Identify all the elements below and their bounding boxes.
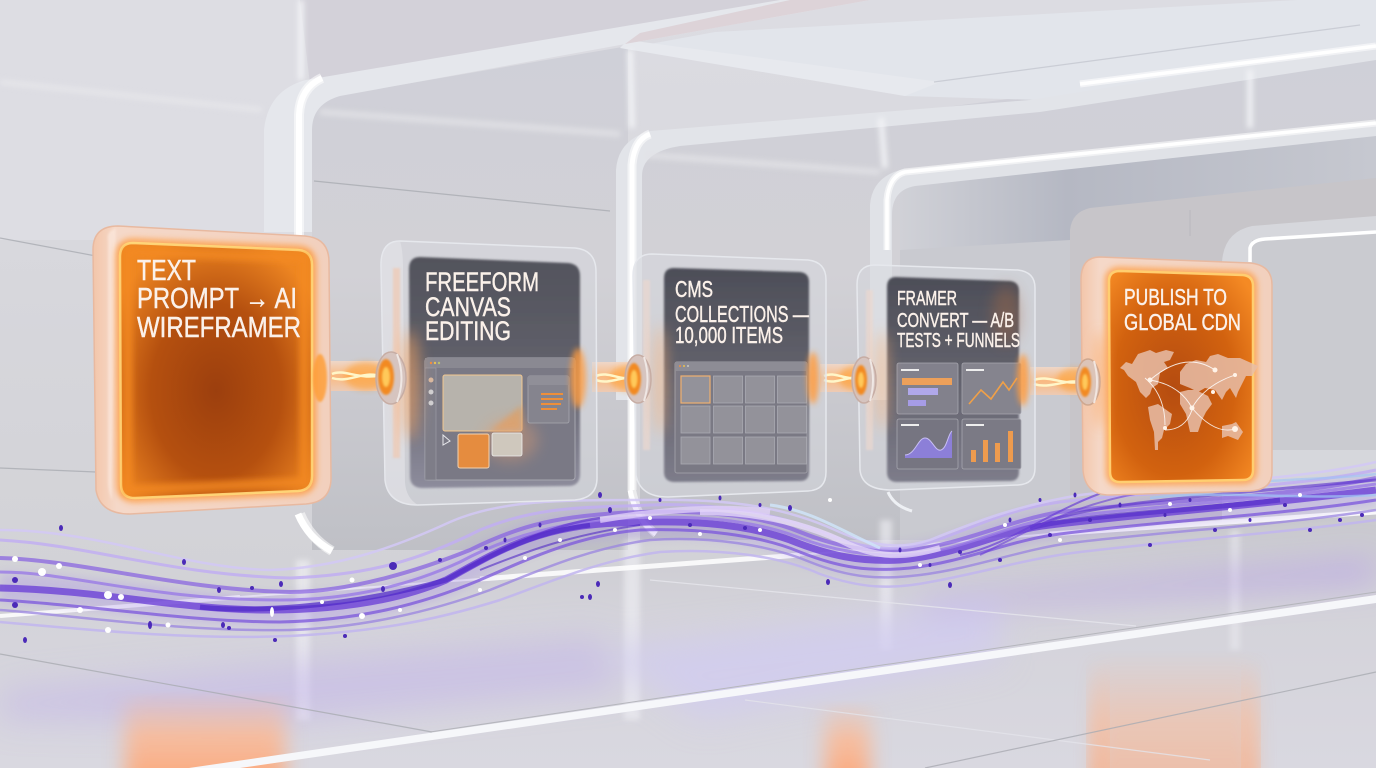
network arcs: [1145, 362, 1235, 430]
floor bright strip: [189, 595, 1376, 768]
side panel: [528, 376, 569, 423]
back room: [1070, 178, 1376, 530]
orange floor glow: [125, 650, 1256, 768]
item grid: [681, 376, 806, 464]
arch 1 pillar: [264, 0, 870, 232]
glass slab: [633, 254, 826, 497]
orange screen: [120, 243, 312, 498]
side glow: [654, 325, 666, 435]
interior of first arch: [312, 46, 628, 550]
dark screen: [887, 277, 1019, 482]
main artboard: [443, 375, 522, 431]
arch 2 pillar: [616, 45, 1376, 400]
ring 1: [376, 352, 406, 404]
area chart panel: [897, 419, 958, 469]
ring 4: [1076, 359, 1100, 405]
tube 3: [820, 364, 871, 392]
floor: [0, 510, 1376, 768]
interior of third arch: [900, 128, 1376, 540]
heading: [425, 267, 539, 346]
heading: FREEFORM: [425, 267, 539, 297]
card 2: freeform canvas editing: [381, 241, 597, 505]
tube 2: [592, 362, 646, 392]
heading: PUBLISH TO: [1124, 284, 1227, 310]
thin strands: [0, 478, 1376, 592]
floor reflections: [296, 520, 1240, 720]
connector tubes between cards: [326, 361, 1093, 395]
connector rings at card inputs: [376, 352, 1100, 405]
orange artboard: [458, 434, 489, 468]
line chart panel: [962, 363, 1021, 414]
cream artboard: [492, 433, 522, 456]
card 5: publish to global CDN: [1081, 257, 1272, 495]
copper tint on screen: [992, 285, 1020, 345]
canvas app window: [425, 358, 575, 480]
heading: CONVERT — A/B: [897, 310, 1014, 332]
card 4: Framer Convert A/B tests and funnels: [857, 265, 1035, 490]
card 1: text prompt to AI wireframer: [93, 226, 331, 514]
side glow: [1095, 330, 1105, 430]
ring 2: [625, 355, 651, 403]
faint vertical wall lights: [0, 0, 1250, 172]
south america: [1148, 404, 1172, 450]
bar chart panel: [962, 419, 1021, 469]
heading: CMS: [675, 276, 713, 302]
particles: [12, 492, 1364, 643]
heading: [675, 276, 809, 348]
card 3: CMS collections: [633, 254, 826, 497]
dark screen: [664, 268, 809, 482]
glass slab: [857, 265, 1035, 490]
heading: [897, 288, 1020, 352]
main thick strand: [0, 490, 1376, 610]
heading: GLOBAL CDN: [1124, 309, 1241, 335]
arch 3 pillar: [870, 123, 1376, 400]
stream glow: [0, 490, 1376, 610]
heading: EDITING: [425, 316, 511, 346]
light strip glow: [299, 46, 1376, 551]
heading: PROMPT → AI: [137, 283, 297, 315]
arch 1 beam underside: [625, 0, 870, 44]
north america: [1120, 350, 1174, 398]
cursor: [443, 435, 450, 445]
glass slab: [381, 241, 597, 505]
ceiling between the arches: [300, 0, 790, 84]
purple data stream: [0, 462, 1376, 643]
australia: [1222, 422, 1243, 440]
heading: 10,000 ITEMS: [675, 322, 783, 348]
glass slab: [93, 226, 331, 514]
tube 1: [326, 361, 388, 391]
bright light strips: [298, 46, 1376, 551]
side glow: [876, 330, 888, 430]
heading: FRAMER: [897, 288, 957, 310]
right end panel: [1222, 216, 1376, 530]
tube 4: [1030, 367, 1093, 395]
glowing floor edge strip: [0, 512, 1376, 616]
heading: TESTS + FUNNELS: [897, 330, 1020, 352]
side glow: [400, 330, 420, 440]
heading: [1124, 284, 1241, 335]
tube bulge: [313, 354, 327, 402]
purple floor glow: [0, 560, 1376, 725]
ceiling panel: [628, 0, 1376, 100]
network nodes: [1148, 368, 1238, 432]
africa: [1180, 390, 1212, 432]
glass slab: [1081, 257, 1272, 495]
left wall upper tone: [0, 0, 300, 240]
heading: [137, 255, 301, 344]
heading: CANVAS: [425, 292, 511, 322]
screen halo: [1109, 271, 1253, 482]
orange screen: [1109, 271, 1253, 482]
collection window: [675, 362, 807, 473]
screen halo: [120, 243, 312, 498]
A/B bars panel: [897, 363, 958, 414]
eurasia: [1180, 354, 1258, 400]
dark screen: [409, 257, 580, 488]
heading: WIREFRAMER: [137, 312, 301, 344]
interior of second arch: [640, 52, 1376, 540]
darker core segments: [200, 525, 590, 609]
world map: [1120, 350, 1258, 450]
heading: COLLECTIONS —: [675, 301, 809, 327]
ring 3: [852, 357, 876, 403]
heading: TEXT: [137, 255, 196, 287]
